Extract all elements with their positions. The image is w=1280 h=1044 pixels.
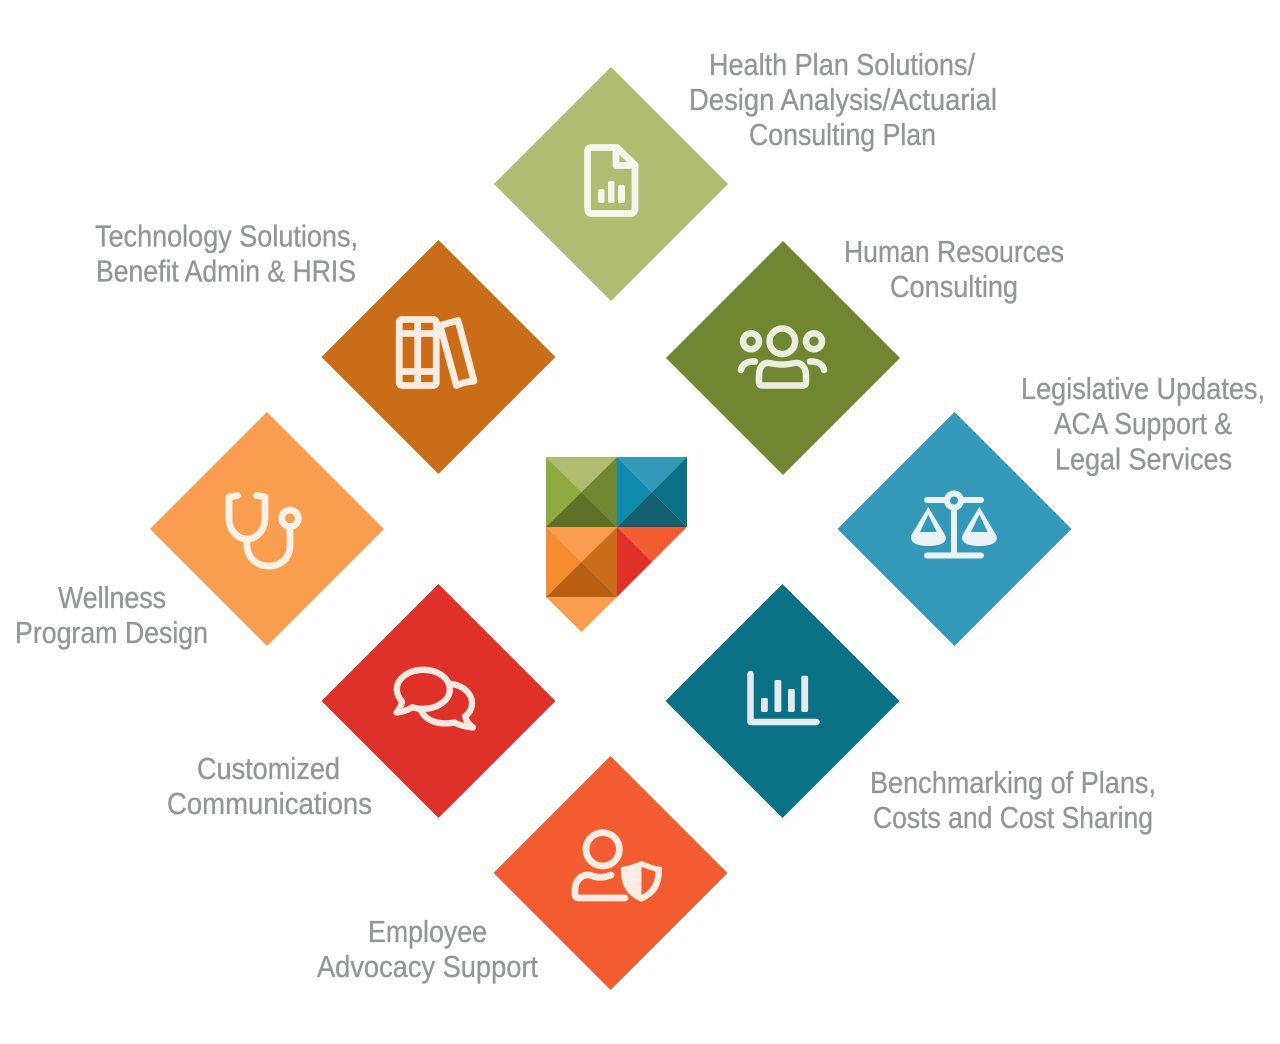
icon: balance scale [911, 494, 997, 556]
label: benchmarking: Benchmarking of Plans, [870, 765, 1156, 800]
label: health plan solutions: Consulting Plan [749, 117, 936, 152]
panel: customized communications [167, 584, 556, 821]
panel: human resources consulting [666, 234, 1064, 475]
label: health plan solutions: Health Plan Solutions/ [709, 47, 975, 82]
label: wellness program design: Program Design [15, 615, 208, 650]
icon: stethoscope [229, 496, 298, 566]
label: customized communications [167, 751, 372, 821]
label: wellness program design: Wellness [58, 580, 166, 615]
diamond: communications [322, 584, 556, 818]
diamond: employee advocacy [494, 756, 728, 990]
label: technology solutions: Benefit Admin & HRIS [96, 254, 356, 288]
label: employee advocacy: Advocacy Support [317, 949, 538, 984]
diamond: technology [322, 240, 556, 474]
panel: technology solutions [95, 218, 556, 474]
diamond: benchmarking [666, 584, 900, 818]
diamond: wellness [150, 412, 384, 646]
diamond: legislative [838, 412, 1072, 646]
icon: books [399, 320, 474, 386]
icon: person with shield [575, 833, 662, 902]
panel: employee advocacy [317, 756, 728, 990]
label: wellness program design [15, 580, 208, 650]
panel: legislative updates [838, 371, 1265, 646]
icon: speech bubbles [396, 670, 473, 728]
label: employee advocacy: Employee [368, 914, 487, 949]
label: technology solutions [95, 218, 358, 288]
label: legislative updates: ACA Support & [1054, 406, 1232, 441]
label: benchmarking: Costs and Cost Sharing [873, 800, 1153, 835]
icon: bar chart [750, 674, 816, 722]
label: benchmarking [870, 765, 1156, 835]
label: health plan solutions [689, 47, 997, 152]
central logo [546, 457, 687, 632]
label: human resources consulting [844, 234, 1064, 304]
label: customized communications: Customized [197, 751, 340, 786]
label: technology solutions: Technology Solutions, [95, 218, 358, 254]
label: legislative updates [1021, 371, 1265, 476]
label: health plan solutions: Design Analysis/Actuarial [689, 82, 997, 117]
label: legislative updates: Legal Services [1055, 442, 1232, 476]
icon: group of people [741, 328, 824, 386]
label: customized communications: Communications [167, 786, 372, 821]
diamond: health plan [494, 67, 728, 301]
diamond: human resources [666, 241, 900, 475]
icon: document with bar chart [588, 148, 635, 214]
label: human resources consulting: Consulting [890, 269, 1018, 304]
panel: benchmarking [666, 584, 1156, 835]
panel: health plan solutions [494, 47, 997, 301]
label: employee advocacy [317, 914, 538, 984]
panel: wellness program design [15, 412, 384, 650]
label: human resources consulting: Human Resources [844, 234, 1064, 269]
